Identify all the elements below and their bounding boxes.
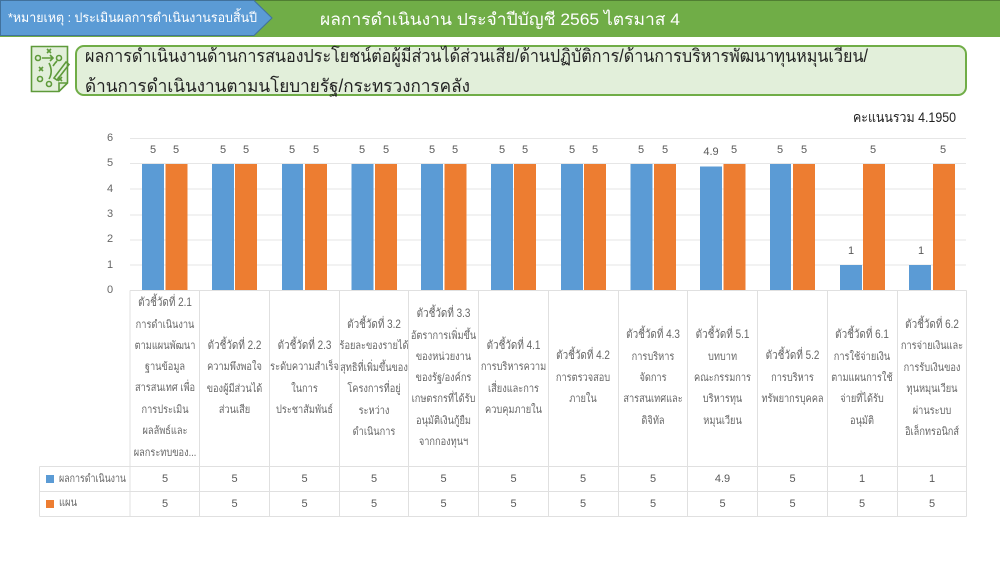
legend: plan row bbox=[46, 497, 935, 510]
indicator 2.1: ตามแผนพัฒนา bbox=[135, 340, 195, 352]
panel: section heading bbox=[76, 45, 966, 97]
indicator 4.1: ควบคุมภายใน bbox=[485, 403, 542, 416]
indicator 2.1: การดำเนินงาน bbox=[136, 318, 194, 331]
data labels: 5 bbox=[569, 144, 575, 156]
data labels: 5 bbox=[662, 144, 668, 156]
header title: ผลการดำเนินงาน ประจำปีบัญชี 2565 ไตรมาส 4 bbox=[320, 9, 680, 29]
legend: plan row: 5 bbox=[859, 498, 865, 510]
y axis labels: 1 bbox=[107, 259, 113, 271]
note tag bbox=[0, 0, 272, 36]
icon: strategy plan bbox=[32, 46, 69, 92]
indicator 4.2: ภายใน bbox=[569, 392, 597, 405]
note tag: *หมายเหตุ : ประเมินผลการดำเนินงานรอบสิ้นปี bbox=[8, 8, 257, 26]
indicator 6.1: การใช้จ่ายเงิน bbox=[834, 350, 890, 363]
indicator 4.1: การบริหารความ bbox=[481, 360, 546, 373]
data labels: 5 bbox=[499, 144, 505, 156]
legend: plan row: 5 bbox=[789, 498, 796, 510]
legend: performance row: 5 bbox=[371, 473, 377, 485]
indicator 5.2: การบริหาร bbox=[771, 371, 814, 384]
data labels: 5 bbox=[777, 144, 783, 156]
indicator 3.3: อัตราการเพิ่มขึ้น bbox=[411, 327, 476, 342]
indicator 4.3: การบริหาร bbox=[632, 350, 675, 363]
indicator 4.1: เสี่ยงและการ bbox=[488, 380, 539, 395]
indicator 4.2: ตัวชี้วัดที่ 4.2 bbox=[556, 346, 610, 362]
indicator 2.2: ส่วนเสีย bbox=[219, 403, 250, 416]
header bar bbox=[0, 0, 1000, 37]
y axis labels: 6 bbox=[107, 132, 113, 144]
legend: performance row: 5 bbox=[580, 473, 586, 485]
data labels: 5 bbox=[452, 144, 458, 156]
total score: คะแนนรวม 4.1950 bbox=[853, 109, 956, 125]
indicator 6.2: อิเล็กทรอนิกส์ bbox=[905, 423, 959, 438]
indicator 6.2: ทุนหมุนเวียน bbox=[907, 382, 958, 395]
legend: plan row: 5 bbox=[719, 498, 726, 510]
indicator 2.1: ผลลัพธ์และ bbox=[143, 424, 187, 437]
indicator 4.3: ดิจิทัล bbox=[641, 414, 665, 427]
indicator 2.1: การประเมิน bbox=[141, 403, 189, 416]
indicator 6.1: จ่ายที่ได้รับ bbox=[840, 390, 884, 405]
legend: performance row: 5 bbox=[510, 473, 517, 485]
indicator 6.2: ตัวชี้วัดที่ 6.2 bbox=[905, 315, 959, 331]
data labels: 5 bbox=[383, 144, 389, 156]
data labels: 5 bbox=[429, 144, 435, 156]
y axis labels: 3 bbox=[107, 208, 113, 220]
legend: plan row: 5 bbox=[231, 498, 238, 510]
indicator 4.2: การตรวจสอบ bbox=[556, 372, 610, 384]
data labels: 5 bbox=[289, 144, 295, 156]
legend: performance row: ผลการดำเนินงาน bbox=[59, 473, 126, 485]
indicator 3.3: จากกองทุนฯ bbox=[419, 436, 468, 448]
indicator 2.1: ฐานข้อมูล bbox=[145, 360, 185, 373]
data labels: 4.9 bbox=[703, 146, 719, 158]
legend: plan row: 5 bbox=[301, 498, 308, 510]
indicator 3.3: อนุมัติเงินกู้ยืม bbox=[416, 413, 471, 427]
indicator 3.2: สุทธิที่เพิ่มขึ้นของ bbox=[340, 359, 408, 374]
data labels: 5 bbox=[173, 144, 179, 156]
legend: performance row: 1 bbox=[929, 473, 935, 485]
heading line 2: ด้านการดำเนินงานตามนโยบายรัฐ/กระทรวงการคลัง bbox=[85, 75, 470, 97]
data table bbox=[40, 290, 966, 516]
y axis labels: 2 bbox=[107, 233, 113, 245]
indicator 5.1: คณะกรรมการ bbox=[694, 372, 751, 384]
indicator 5.1: บริหารทุน bbox=[703, 392, 742, 405]
legend: performance row: 5 bbox=[440, 473, 447, 485]
y axis labels bbox=[107, 132, 113, 296]
data labels: 5 bbox=[220, 144, 226, 156]
y axis labels: 5 bbox=[107, 157, 113, 169]
indicator 3.3: ของรัฐ/องค์กร bbox=[416, 371, 472, 384]
indicator 3.2: ร้อยละของรายได้ bbox=[339, 339, 409, 352]
indicator 6.2: การรับเงินของ bbox=[904, 361, 960, 374]
indicator 2.3: ตัวชี้วัดที่ 2.3 bbox=[278, 336, 331, 352]
indicator 4.3: สารสนเทศและ bbox=[623, 393, 683, 405]
indicator 3.2: ตัวชี้วัดที่ 3.2 bbox=[347, 315, 401, 331]
legend: performance row bbox=[46, 473, 935, 485]
legend: plan row: 5 bbox=[580, 498, 586, 510]
indicator 5.1: ตัวชี้วัดที่ 5.1 bbox=[696, 325, 749, 341]
indicator 6.2: การจ่ายเงินและ bbox=[901, 339, 963, 352]
indicator 3.2: โครงการที่อยู่ bbox=[347, 380, 401, 395]
indicator 3.3: เกษตรกรที่ได้รับ bbox=[412, 390, 475, 405]
indicator 2.1: ตัวชี้วัดที่ 2.1 bbox=[138, 293, 192, 309]
indicator 3.3: ตัวชี้วัดที่ 3.3 bbox=[417, 304, 470, 320]
data labels: 5 bbox=[592, 144, 598, 156]
bar chart bbox=[107, 132, 966, 296]
indicator 2.3: ประชาสัมพันธ์ bbox=[276, 403, 333, 416]
indicator 2.1: ผลกระทบของ... bbox=[134, 447, 196, 459]
legend: performance row: 5 bbox=[301, 473, 308, 485]
indicator 2.2: ความพึงพอใจ bbox=[207, 360, 262, 373]
indicator 3.3: ของหน่วยงาน bbox=[416, 351, 471, 363]
indicator 6.1: ตามแผนการใช้ bbox=[831, 371, 893, 384]
indicator labels bbox=[134, 293, 963, 459]
legend: plan row: 5 bbox=[440, 498, 447, 510]
indicator 4.3: จัดการ bbox=[639, 372, 667, 384]
indicator 5.1: หมุนเวียน bbox=[703, 414, 742, 427]
legend: plan row: 5 bbox=[510, 498, 517, 510]
legend: performance row: 5 bbox=[231, 473, 238, 485]
indicator 2.2: ตัวชี้วัดที่ 2.2 bbox=[208, 336, 261, 352]
legend: performance row: 1 bbox=[859, 473, 865, 485]
orange bars: plan bbox=[166, 164, 955, 290]
indicator 5.1: บทบาท bbox=[708, 351, 737, 363]
legend: performance row: 5 bbox=[162, 473, 168, 485]
indicator 5.2: ตัวชี้วัดที่ 5.2 bbox=[766, 346, 819, 362]
data labels: 5 bbox=[150, 144, 156, 156]
data labels: 5 bbox=[243, 144, 249, 156]
blue bars: performance bbox=[142, 164, 931, 290]
indicator 2.3: ในการ bbox=[291, 382, 318, 395]
legend: plan row: 5 bbox=[650, 498, 656, 510]
indicator 3.2: ดำเนินการ bbox=[353, 425, 396, 438]
indicator 5.2: ทรัพยากรบุคคล bbox=[761, 393, 824, 405]
data labels: 5 bbox=[870, 144, 876, 156]
indicator 6.1: ตัวชี้วัดที่ 6.1 bbox=[835, 325, 889, 341]
data labels: 5 bbox=[731, 144, 737, 156]
indicator 2.3: ระดับความสำเร็จ bbox=[270, 358, 339, 373]
data labels: 5 bbox=[638, 144, 644, 156]
indicator 6.2: ผ่านระบบ bbox=[913, 405, 951, 417]
data labels: 5 bbox=[359, 144, 365, 156]
data labels: 5 bbox=[801, 144, 807, 156]
legend: performance row: 5 bbox=[789, 473, 796, 485]
indicator 3.2: ระหว่าง bbox=[359, 405, 389, 417]
y axis labels: 0 bbox=[107, 284, 113, 296]
data labels: 5 bbox=[522, 144, 528, 156]
data labels: 1 bbox=[918, 245, 924, 257]
y axis labels: 4 bbox=[107, 183, 113, 195]
indicator 2.2: ของผู้มีส่วนได้ bbox=[207, 382, 262, 395]
indicator 2.1: สารสนเทศ เพื่อ bbox=[135, 379, 195, 394]
data labels bbox=[150, 144, 946, 257]
data labels: 5 bbox=[313, 144, 319, 156]
legend: performance row: 5 bbox=[650, 473, 656, 485]
data labels: 5 bbox=[940, 144, 946, 156]
legend: plan row: 5 bbox=[929, 498, 935, 510]
indicator 4.1: ตัวชี้วัดที่ 4.1 bbox=[487, 336, 540, 352]
legend: plan row: แผน bbox=[59, 497, 77, 509]
indicator 4.3: ตัวชี้วัดที่ 4.3 bbox=[626, 325, 680, 341]
indicator 6.1: อนุมัติ bbox=[850, 414, 874, 427]
data labels: 1 bbox=[848, 245, 854, 257]
legend: performance row: 4.9 bbox=[715, 473, 730, 485]
legend: plan row: 5 bbox=[162, 498, 168, 510]
heading line 1: ผลการดำเนินงานด้านการสนองประโยชน์ต่อผู้มีส่วนได้ส่วนเสีย/ด้านปฏิบัติการ/ด้านการบริหารพัฒนาทุนหมุนเวียน/ bbox=[85, 45, 868, 67]
legend: plan row: 5 bbox=[371, 498, 377, 510]
